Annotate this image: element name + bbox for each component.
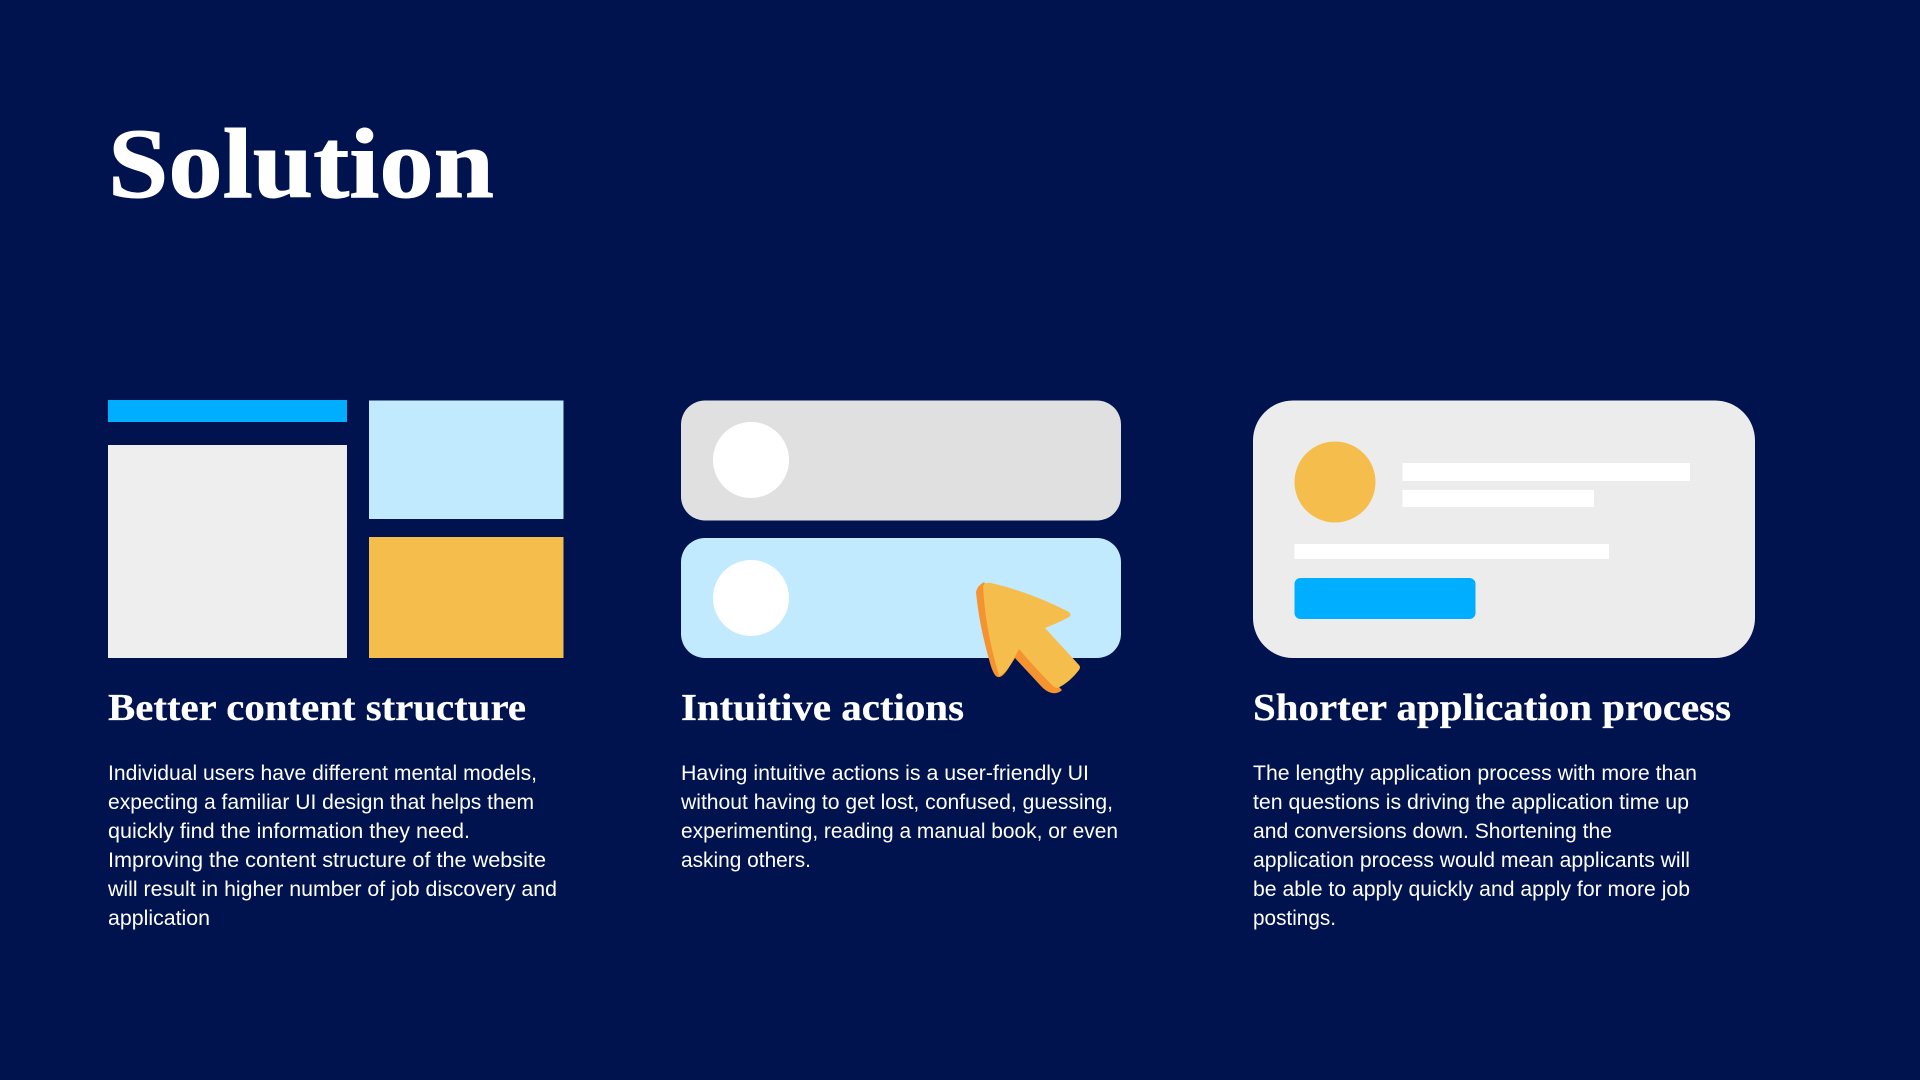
text block: shorter application process: and conversions down. Shortening the xyxy=(1253,820,1612,843)
text block: intuitive actions: asking others. xyxy=(681,849,811,872)
heading: shorter application process: Shorter application process xyxy=(1253,687,1731,729)
icon: cursor arrow xyxy=(976,582,1080,693)
text block: better content structure: will result in higher number of job discovery and xyxy=(107,878,557,901)
text block: better content structure: expecting a familiar UI design that helps them xyxy=(108,791,534,814)
panel: shorter application process xyxy=(1253,400,1755,930)
title: Solution xyxy=(108,108,494,219)
text block: intuitive actions: Having intuitive actions is a user-friendly UI xyxy=(681,762,1089,785)
text block: better content structure: Improving the content structure of the website xyxy=(108,849,546,872)
heading: better content structure: Better content structure xyxy=(108,687,526,729)
icon: list rows with cursor xyxy=(681,400,1121,693)
text block: better content structure xyxy=(107,762,557,930)
text block: shorter application process xyxy=(1253,762,1697,930)
icon: layout wireframe xyxy=(108,400,564,658)
text block: better content structure: quickly find the information they need. xyxy=(108,820,470,843)
text block: intuitive actions: without having to get lost, confused, guessing, xyxy=(680,791,1113,814)
panel: intuitive actions xyxy=(680,400,1121,872)
heading: intuitive actions: Intuitive actions xyxy=(681,687,964,729)
text block: better content structure: Individual users have different mental models, xyxy=(108,762,537,785)
text block: shorter application process: be able to apply quickly and apply for more job xyxy=(1253,878,1690,901)
text block: shorter application process: application process would mean applicants will xyxy=(1253,849,1690,872)
text block: shorter application process: postings. xyxy=(1253,907,1336,930)
text block: better content structure: application xyxy=(108,907,210,930)
text block: intuitive actions: experimenting, reading a manual book, or even xyxy=(681,820,1118,843)
icon: application card xyxy=(1253,400,1755,658)
text block: shorter application process: The lengthy application process with more than xyxy=(1253,762,1697,785)
panel: better content structure xyxy=(107,400,564,930)
text block: intuitive actions xyxy=(680,762,1118,872)
text block: shorter application process: ten questions is driving the application time up xyxy=(1253,791,1689,814)
